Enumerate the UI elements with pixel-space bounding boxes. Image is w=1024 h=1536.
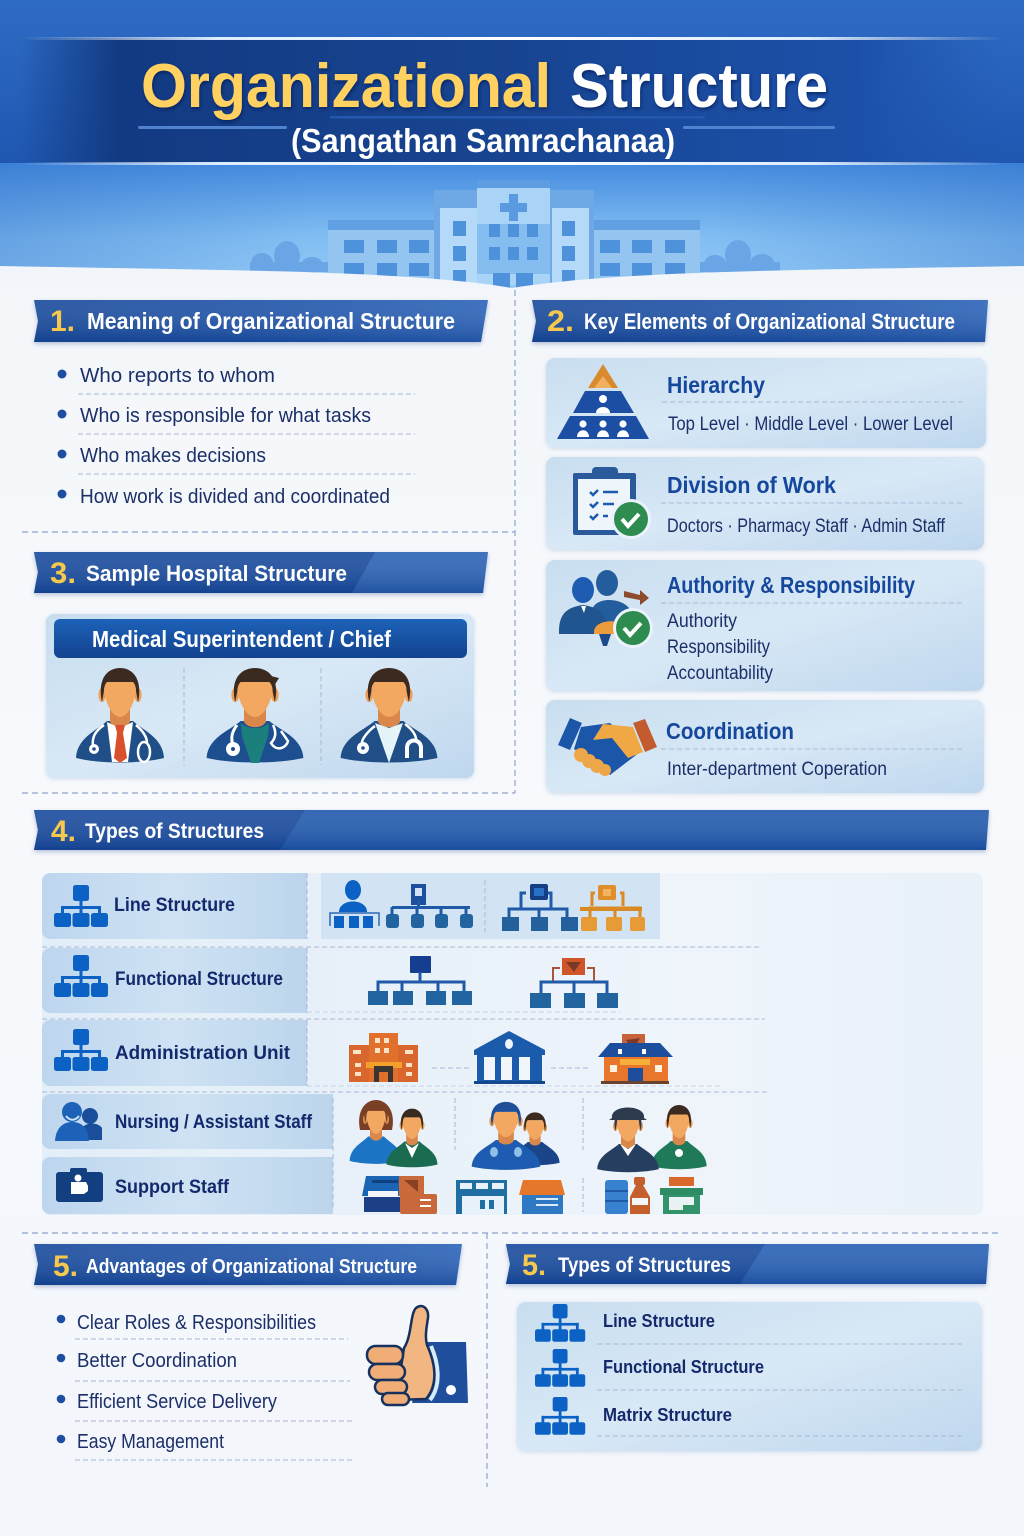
row: line structure: Line Structure [114,895,235,916]
heading 3: Sample Hospital Structure [86,561,347,586]
icon: nursing pair [350,1100,438,1167]
row: nursing assistant staff [42,1094,333,1149]
panel: coordination card [546,700,984,793]
icon: shop [519,1180,565,1214]
panel: division of work card [546,457,984,550]
panel: division of work card: Division of Work [667,472,836,498]
icon: clipboard [573,467,651,539]
panel: authority card: Accountability [667,663,773,684]
icon: functional charts [368,956,618,1008]
panel: meaning list: Who makes decisions [80,445,266,467]
panel: meaning list: Who is responsible for what tasks [80,405,371,427]
panel: meaning list: How work is divided and coordinated [80,486,390,508]
heading 3 [34,552,488,593]
icon: support staff [56,1168,103,1202]
panel: meaning list: Who reports to whom [80,365,275,387]
heading 5 advantages: Advantages of Organizational Structure [86,1256,417,1278]
panel: types list: Line Structure [603,1311,715,1331]
heading 5 types: 5. [522,1249,546,1282]
row: support staff: Support Staff [115,1177,230,1198]
icon: house [598,1034,673,1084]
panel: advantages list: Better Coordination [77,1350,237,1372]
section dividers [22,290,1000,1487]
heading 4: Types of Structures [85,820,264,843]
icon: blue institution [474,1031,545,1084]
panel: authority card: Authority & Responsibility [667,572,915,598]
heading 4: 4. [51,815,76,848]
panel: types list: Matrix Structure [603,1405,732,1425]
icon: pharmacy shelf [456,1180,507,1214]
heading 3: 3. [50,557,76,590]
panel: meaning list [58,365,415,508]
medical superintendent bar: Medical Superintendent / Chief [92,626,391,652]
panel: advantages list: Easy Management [77,1431,224,1453]
medical superintendent bar [54,619,467,658]
panel: authority card: Responsibility [667,637,770,658]
heading 2: 2. [547,305,574,338]
panel: advantages list [57,1312,354,1460]
heading 2 [532,300,988,342]
hospital illustration [250,180,780,288]
heading 4 [34,810,989,850]
subtitle: (Sangathan Samrachanaa) [291,122,675,159]
icon: orange building [349,1033,418,1082]
doctor 1 [76,668,164,763]
icon: supply box [660,1177,703,1214]
title: Organizational [141,52,551,121]
panel: advantages list: Efficient Service Delivery [77,1391,277,1413]
icon: thumbs up [367,1306,468,1405]
panel: hierarchy card [546,358,986,448]
panel: hierarchy card: Top Level · Middle Level · Lower Level [668,414,953,435]
row: line structure [42,873,660,939]
row: functional structure: Functional Structure [115,969,283,990]
panel: authority card: Authority [667,611,737,632]
heading 2: Key Elements of Organizational Structure [584,309,955,334]
row: support staff [42,1157,333,1214]
subtitle [138,116,835,159]
panel: types list [517,1302,982,1451]
icon: line structure charts [330,880,645,931]
heading 5 types [506,1244,989,1284]
icon: doctor pair [472,1102,560,1170]
panel: coordination card: Inter-department Coperation [667,759,887,780]
heading 5 types: Types of Structures [558,1254,731,1277]
row: functional structure [42,948,618,1013]
icon: nursing staff [55,1102,102,1141]
icon: support equipment [362,1176,437,1214]
heading 1: 1. [50,305,75,338]
row: administration unit [42,1020,673,1086]
header banner [0,0,1024,288]
heading 5 advantages: 5. [53,1250,78,1283]
panel: hierarchy card: Hierarchy [667,372,765,398]
panel: types of structures [42,873,983,1215]
doctor 3 [341,668,437,763]
title [141,52,828,121]
panel: types list: Functional Structure [603,1357,764,1377]
panel: authority card [546,560,984,691]
icon: pyramid [557,364,649,439]
title: Structure [570,52,828,121]
panel: sample hospital structure [46,614,474,778]
icon: guard and medic pair [597,1105,707,1172]
heading 1: Meaning of Organizational Structure [87,308,455,334]
heading 5 advantages [34,1244,462,1285]
heading 1 [34,300,488,342]
panel: coordination card: Coordination [666,718,794,744]
doctor 2 [207,668,303,763]
icon: handshake [558,718,657,776]
panel: division of work card: Doctors · Pharmacy Staff · Admin Staff [667,516,946,537]
row: administration unit: Administration Unit [115,1043,291,1064]
panel: advantages list: Clear Roles & Responsibilities [77,1312,316,1334]
row: nursing assistant staff: Nursing / Assistant Staff [115,1112,313,1133]
icon: supply bottles [605,1177,650,1214]
paper curve [0,266,1024,290]
icon: authority people [559,570,653,648]
